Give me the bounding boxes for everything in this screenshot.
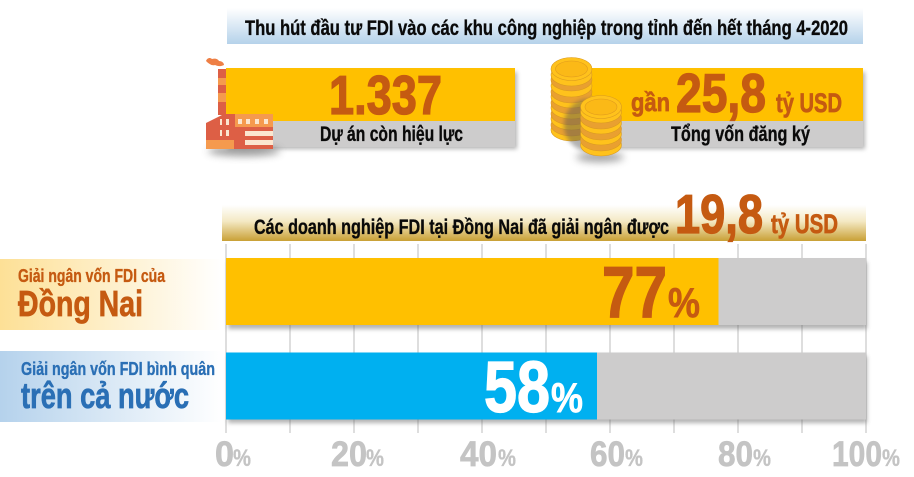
axis labels: % (625, 445, 643, 472)
label: registered capital: Tổng vốn đăng ký (671, 123, 810, 146)
label: Dong Nai (0, 259, 222, 330)
axis labels: 40 (460, 435, 497, 474)
value: 58: 58 (484, 348, 550, 428)
title band (227, 8, 863, 44)
axis labels: 0 (215, 435, 234, 474)
unit: billion USD: tỷ USD (771, 209, 838, 239)
bar: Dong Nai 77% (226, 253, 867, 333)
text: near: gần (631, 87, 670, 117)
axis labels: 60 (590, 435, 625, 474)
label: national average (0, 351, 222, 422)
label: national average: Giải ngân vốn FDI bình quân (21, 359, 215, 379)
axis labels (215, 435, 900, 474)
unit: billion USD: tỷ USD (776, 88, 842, 118)
label: Dong Nai: Đồng Nai (18, 283, 143, 324)
axis labels: % (233, 445, 251, 472)
panel: projects card (226, 64, 517, 149)
icon: factory (206, 58, 280, 156)
label: national average: trên cả nước (21, 375, 189, 416)
disbursed heading band (222, 183, 866, 245)
value: percent sign: % (668, 279, 700, 326)
number: projects: 1.337 (329, 64, 442, 126)
bar: national 58% (226, 348, 867, 428)
label: Dong Nai: Giải ngân vốn FDI của (18, 266, 166, 286)
label: valid projects: Dự án còn hiệu lực (320, 123, 463, 146)
disbursed heading band: Các doanh nghiệp FDI tại Đồng Nai đã giải ngân được (254, 216, 669, 239)
value: percent sign: % (551, 374, 583, 421)
axis labels: % (882, 445, 900, 472)
axis labels: % (498, 445, 516, 472)
number: capital: 25,8 (676, 62, 766, 124)
number: disbursed: 19,8 (675, 183, 763, 245)
axis labels: 100 (832, 435, 882, 474)
axis labels: 80 (718, 435, 753, 474)
icon: coins (551, 58, 624, 162)
axis labels: % (753, 445, 771, 472)
axis labels: % (366, 445, 384, 472)
panel: capital card (590, 62, 865, 149)
axis labels: 20 (331, 435, 367, 474)
value: 77: 77 (602, 253, 667, 333)
